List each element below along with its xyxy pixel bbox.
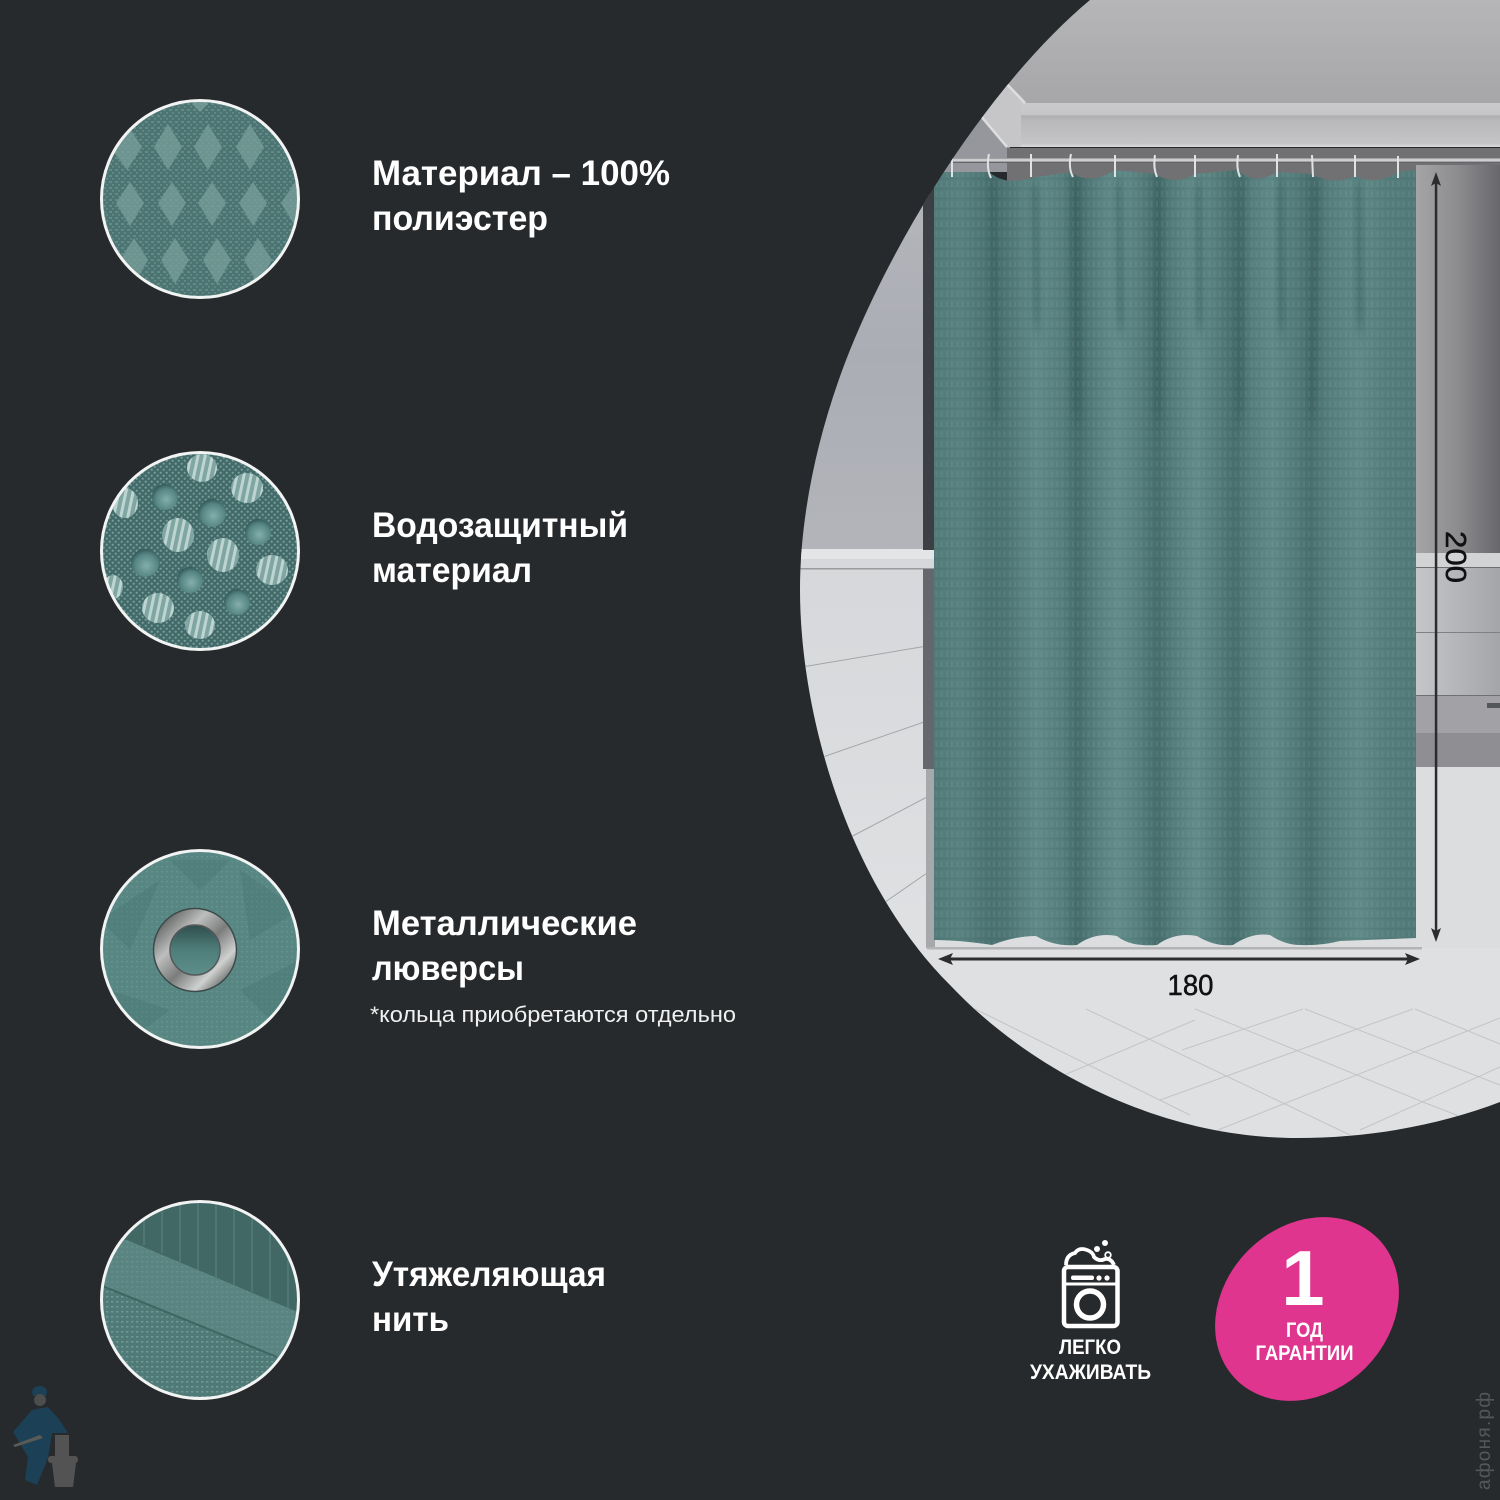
woven fabric base	[100, 99, 300, 299]
width dimension arrow	[938, 953, 1420, 965]
plumber logo	[13, 1386, 78, 1487]
feature 4 text: нить	[372, 1300, 449, 1339]
plumber figure	[13, 1386, 68, 1485]
right wainscot	[1416, 553, 1500, 767]
feature 2 text: Водозащитный	[372, 506, 628, 545]
waffle weave	[983, 171, 1362, 945]
site watermark: афоня.рф	[1474, 1392, 1495, 1490]
warranty text: ГОД	[1286, 1319, 1323, 1342]
warranty text: ГАРАНТИИ	[1256, 1342, 1354, 1365]
feature 4: weighted thread swatch	[100, 1200, 300, 1400]
curtain rings	[952, 154, 1398, 178]
striped drops	[103, 454, 288, 639]
ceiling	[990, 0, 1500, 106]
clear drops	[131, 484, 271, 615]
lower fabric	[103, 1240, 296, 1397]
grommet footnote: *кольца приобретаются отдельно	[370, 1002, 736, 1027]
feature 2: water drops swatch	[100, 451, 300, 651]
feature 4 text: Утяжеляющая	[372, 1255, 606, 1294]
swatch ring	[102, 452, 298, 650]
bathtub front	[927, 767, 1500, 950]
upper narrow fold shadows	[989, 176, 1364, 420]
easy care label: УХАЖИВАТЬ	[1030, 1361, 1151, 1384]
molding corner edges	[980, 80, 1025, 147]
right wall	[1416, 165, 1500, 555]
hem seam	[100, 1285, 277, 1357]
feature 3 text	[372, 904, 637, 988]
fabric base	[100, 849, 300, 1049]
swatch ring	[102, 850, 298, 1048]
easy care label: ЛЕГКО	[1059, 1336, 1121, 1359]
alcove column	[923, 172, 935, 949]
crown molding corner	[982, 85, 1023, 147]
hem band	[104, 1240, 296, 1357]
height dimension arrow	[1431, 172, 1441, 942]
feature 3 text: люверсы	[372, 949, 524, 988]
floor	[918, 948, 1500, 1138]
hem band weave	[90, 1240, 310, 1370]
floor tile lines	[975, 1009, 1500, 1135]
icon: washing machine	[1064, 1240, 1118, 1326]
left wall upper	[801, 194, 930, 555]
warranty text	[1256, 1319, 1354, 1365]
upper fabric ribs	[144, 1200, 288, 1308]
swatch ring	[102, 1202, 298, 1398]
crown molding	[1021, 103, 1500, 147]
warranty number: 1	[1281, 1234, 1325, 1322]
feature 1 text	[372, 154, 670, 238]
bathroom scene photo	[780, 0, 1500, 1148]
corner wall behind rail	[944, 100, 1010, 172]
warranty badge	[1178, 1180, 1436, 1438]
shadow band under molding	[1007, 148, 1500, 181]
feature 2 text: материал	[372, 551, 532, 590]
toilet	[48, 1435, 78, 1487]
feature 1 text: Материал – 100%	[372, 154, 670, 193]
width label: 180	[1168, 970, 1214, 1002]
diamond motifs	[114, 102, 297, 284]
left lower wall	[790, 549, 935, 969]
wrench	[13, 1435, 43, 1447]
fabric relief	[106, 861, 293, 1028]
metal grommet	[162, 917, 228, 983]
grommet hole	[171, 926, 219, 972]
feature 2 text	[372, 506, 628, 590]
feature 1: material swatch	[100, 96, 309, 299]
woven fabric base	[100, 451, 300, 651]
curtain	[934, 165, 1416, 955]
plumber face	[34, 1394, 46, 1406]
upper dark fabric	[90, 1190, 310, 1318]
floor shadow line	[927, 947, 1422, 950]
swatch ring	[102, 100, 298, 298]
feature 1 text: полиэстер	[372, 199, 548, 238]
height label: 200	[1439, 531, 1471, 583]
feature 4 text	[372, 1255, 606, 1339]
easy care label	[1030, 1336, 1151, 1384]
feature 3: grommet swatch	[100, 849, 300, 1049]
feature 3 text: Металлические	[372, 904, 637, 943]
curtain rail	[948, 158, 1500, 163]
